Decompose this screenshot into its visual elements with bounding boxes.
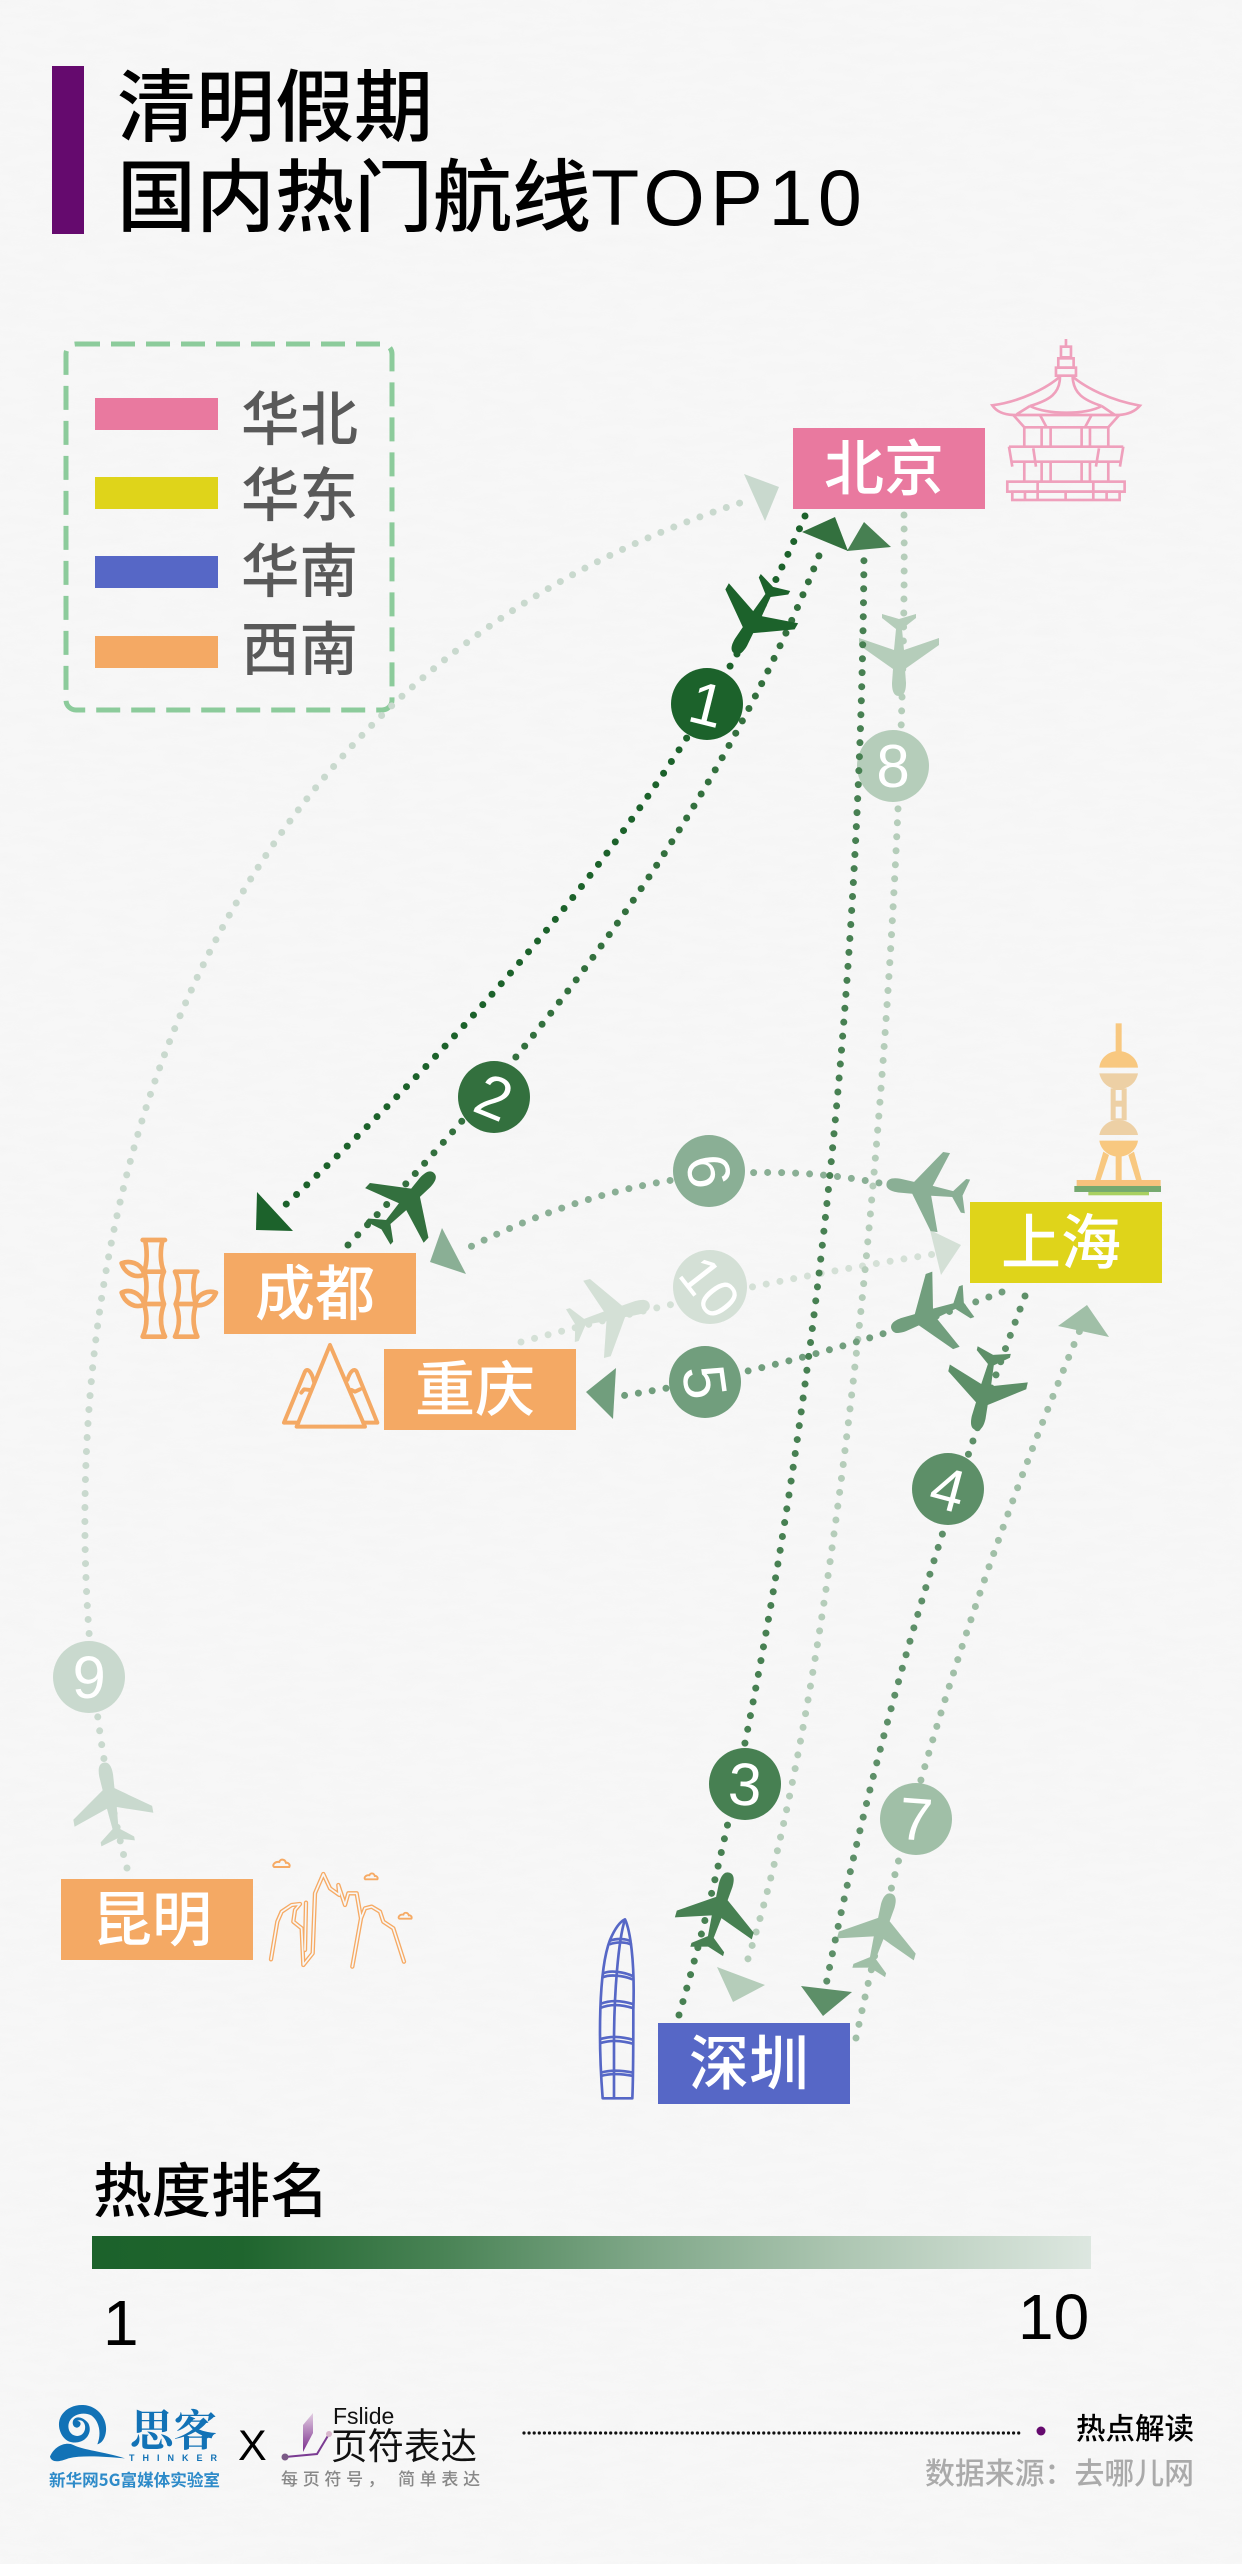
title accent bar: [52, 66, 84, 234]
city label: 北京: 北京: [824, 421, 944, 508]
badge 9: [53, 1641, 125, 1713]
arrowhead 1: [256, 1192, 293, 1231]
legend: 华北: 华北: [241, 372, 358, 457]
arrowhead 6: [430, 1228, 466, 1274]
legend: 华北: [95, 372, 358, 457]
badge 3: [709, 1748, 781, 1820]
badge 1: [671, 668, 743, 741]
badge 1: 1: [683, 668, 731, 741]
gradient bar: [92, 2236, 1091, 2269]
arrowhead 8: [717, 1967, 765, 2002]
plane 1: [700, 562, 810, 674]
icon: Oriental Pearl tower: [1074, 1023, 1161, 1195]
slogan: 每页符号， 简单表达: [281, 2465, 485, 2490]
city label: 上海: 上海: [1001, 1195, 1121, 1282]
route 4: 上海 to 深圳: [801, 1296, 1033, 2016]
route 1: 北京 to 成都: [256, 516, 810, 1231]
icon: Chongqing mountains: [284, 1345, 377, 1427]
badge 8: 8: [876, 733, 910, 800]
plane 3: [668, 1862, 768, 1962]
Fslide mark: [282, 2413, 332, 2460]
city label: 重庆: [384, 1342, 576, 1430]
badge 5: 5: [669, 1361, 740, 1403]
icon: Beijing pagoda: [992, 339, 1140, 500]
lab name: 新华网5G富媒体实验室: [49, 2467, 220, 2491]
plane 8: [859, 614, 939, 696]
route 6: 上海 to 成都: [430, 1135, 974, 1274]
rule end dot: [1036, 2426, 1046, 2436]
footer: 热点解读: 热点解读: [1076, 2406, 1194, 2448]
badge 8: [857, 730, 929, 802]
scale heading: 热度排名: [93, 2144, 329, 2229]
city label: 成都: [224, 1246, 416, 1334]
footer: data source: 数据来源：去哪儿网: [925, 2449, 1194, 2493]
scale min: 1: [103, 2287, 139, 2359]
city label: 深圳: 深圳: [689, 2016, 809, 2103]
city label: 北京: [793, 421, 985, 509]
Fslide wordmark: Fslide: [333, 2403, 394, 2429]
route 2: 成都 to 北京: [348, 517, 848, 1260]
logo: Fslide 页符表达: [281, 2403, 485, 2490]
arrowhead 7: [1058, 1305, 1109, 1337]
plane 2: [349, 1146, 463, 1260]
badge 7: [880, 1783, 952, 1855]
badge 6: 6: [673, 1149, 744, 1193]
heat ranking scale: [92, 2144, 1091, 2359]
title line 1: 清明假期: [117, 43, 433, 158]
arrowhead 3: [847, 522, 891, 551]
route 9: 昆明 to 北京: [53, 474, 779, 1868]
route 8: 北京 to 深圳: [717, 515, 939, 2002]
footer dotted rule: [524, 2426, 1046, 2436]
logo: 思客 THINKER: [49, 2397, 225, 2491]
arrowhead 2: [802, 517, 848, 551]
swirl mark: [50, 2405, 125, 2461]
plane 7: [830, 1883, 930, 1983]
plane 4: [937, 1341, 1033, 1439]
badge 4: [912, 1453, 984, 1526]
legend dashed frame: [66, 344, 392, 710]
badge 7: 7: [897, 1785, 935, 1854]
city label: 重庆: 重庆: [415, 1342, 535, 1429]
legend panel: [66, 344, 392, 710]
badge 3: 3: [727, 1750, 763, 1819]
plane 10: [560, 1266, 660, 1364]
arrowhead 4: [801, 1986, 852, 2016]
badge 5: [669, 1346, 741, 1418]
legend: 华南: 华南: [241, 524, 358, 609]
legend: 西南: 西南: [241, 602, 358, 687]
legend: 华南: [95, 524, 358, 609]
title line 2: 国内热门航线TOP10: [117, 133, 867, 248]
legend: 华东: 华东: [241, 448, 358, 533]
city label: 上海: [970, 1195, 1162, 1283]
city label: 成都: 成都: [255, 1246, 375, 1333]
arrowhead 10: [930, 1230, 961, 1275]
badge 2: 2: [466, 1060, 522, 1135]
arrowhead 9: [744, 474, 779, 521]
badge 6: [673, 1135, 745, 1207]
icon: Shenzhen tower: [599, 1919, 634, 2098]
city label: 昆明: 昆明: [92, 1872, 212, 1959]
THINKER: THINKER: [129, 2453, 225, 2463]
city label: 昆明: [61, 1872, 253, 1960]
route 10: 重庆 to 上海: [521, 1230, 961, 1364]
思客 wordmark: 思客: [130, 2397, 217, 2459]
icon: Chengdu bamboo: [122, 1240, 216, 1337]
legend: 华东: [95, 448, 358, 533]
legend: 西南: [95, 602, 358, 687]
plane 9: [64, 1756, 158, 1850]
scale max: 10: [1018, 2281, 1089, 2353]
route 5: 上海 to 重庆: [586, 1263, 1002, 1419]
plane 6: [880, 1144, 974, 1236]
plane 5: [878, 1263, 982, 1367]
badge 10: 10: [667, 1245, 751, 1330]
city label: 深圳: [658, 2016, 850, 2104]
页符表达: 页符表达: [331, 2417, 477, 2470]
badge 9: 9: [71, 1643, 107, 1712]
title block: [52, 43, 867, 248]
badge 4: 4: [923, 1453, 973, 1526]
icon: Kunming stone forest: [271, 1860, 412, 1967]
route 3: 深圳 to 北京: [668, 522, 891, 2015]
collaboration X: X: [238, 2422, 267, 2470]
arrowhead 5: [586, 1368, 616, 1419]
route 7: 深圳 to 上海: [830, 1305, 1109, 2038]
